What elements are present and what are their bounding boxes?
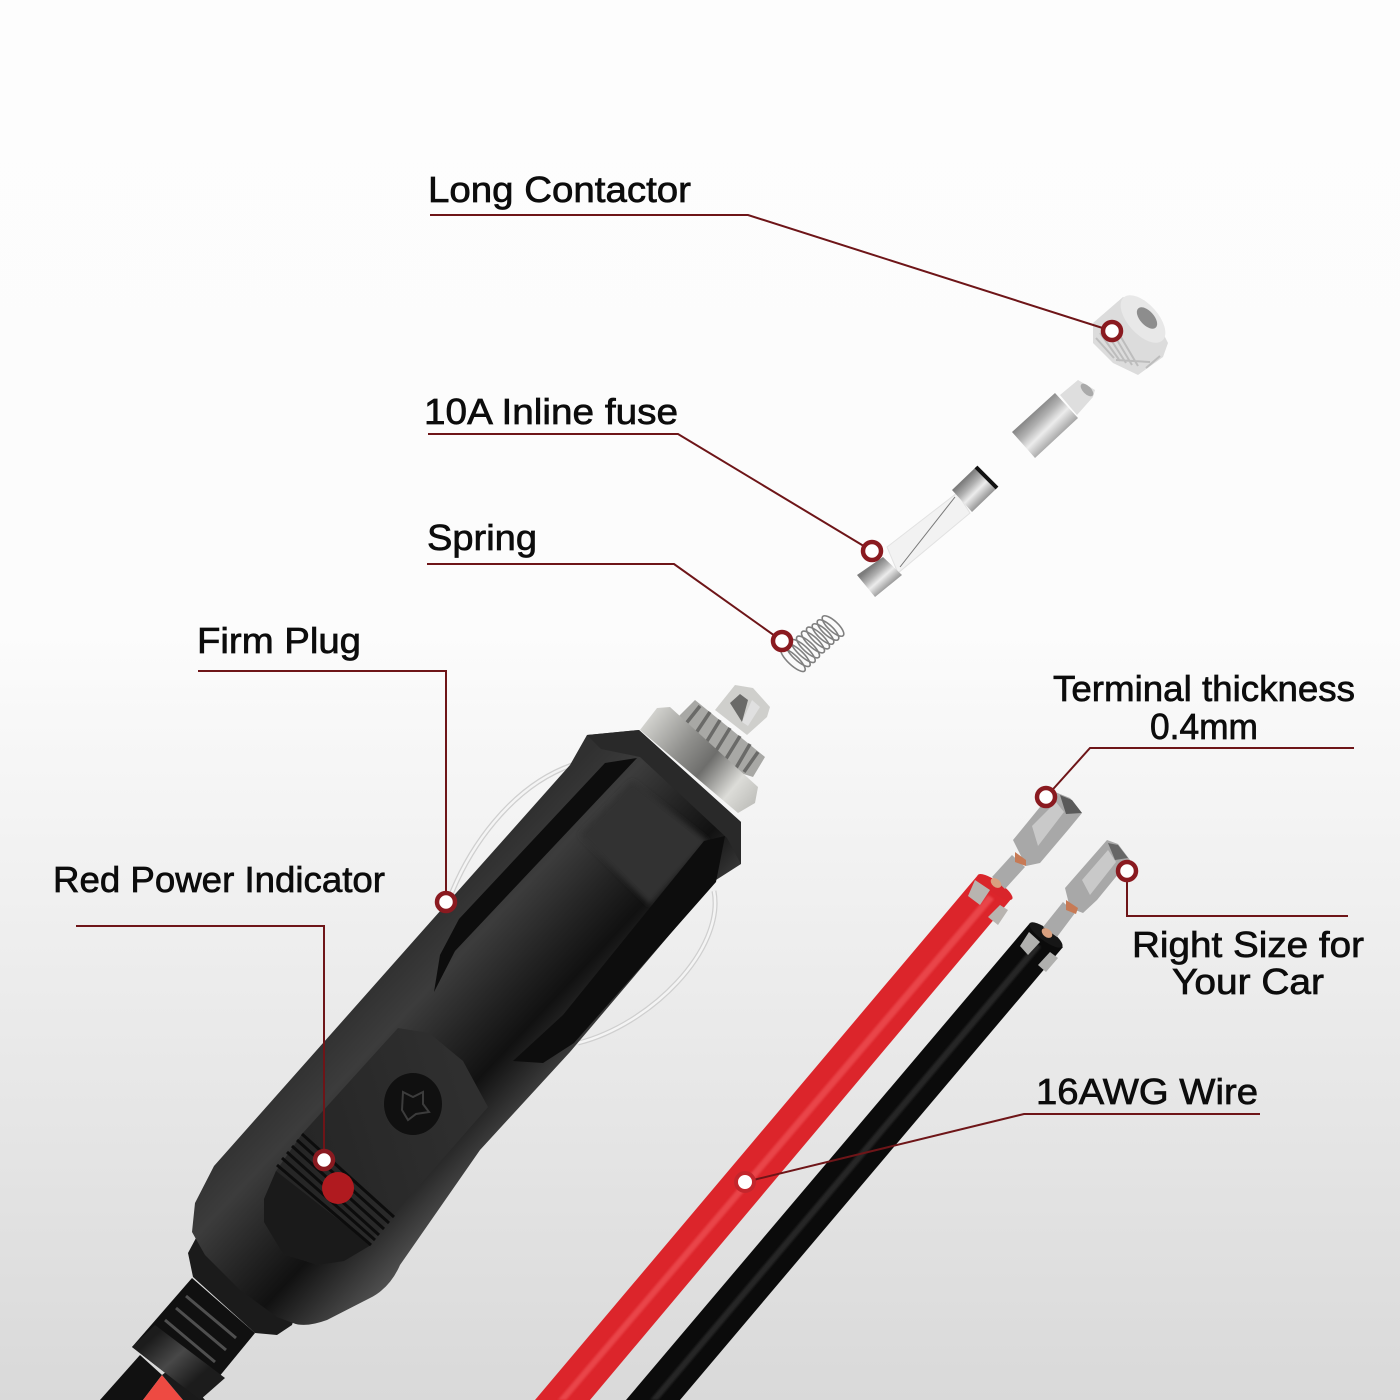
callout: 10A Inline fuse: 10A Inline fuse	[424, 391, 678, 432]
fuse end cap contact	[1012, 380, 1095, 458]
spring	[778, 613, 847, 675]
plug metal tip	[640, 685, 770, 813]
callout: Firm Plug	[197, 620, 455, 911]
plate lower dark area	[264, 1171, 371, 1265]
black wire	[626, 918, 1066, 1400]
ring contact loop top	[442, 765, 572, 920]
callout: Spring	[427, 517, 791, 650]
callout: Terminal thickness 0.4mm	[1037, 668, 1355, 806]
callout: 16AWG Wire: 16AWG Wire	[1036, 1071, 1258, 1112]
callout: Red Power Indicator	[53, 859, 385, 1169]
callout: Terminal thickness 0.4mm: 0.4mm	[1150, 706, 1258, 747]
red indicator LED	[322, 1172, 354, 1204]
callout: Right Size for Your Car: Your Car	[1172, 961, 1324, 1002]
upper groove	[434, 758, 637, 992]
switch plate	[264, 1028, 488, 1265]
front chamfer	[587, 730, 741, 864]
screw	[384, 1073, 442, 1135]
upper terminal	[989, 792, 1082, 890]
callout: Right Size for Your Car: Right Size for	[1132, 924, 1364, 965]
ribs	[277, 1134, 394, 1245]
callout: 10A Inline fuse	[424, 391, 881, 560]
callout: Long Contactor	[428, 169, 1121, 340]
lower groove	[513, 836, 725, 1063]
ring contact loop top highlight	[442, 765, 572, 920]
glass fuse	[857, 467, 997, 597]
callout: Long Contactor: Long Contactor	[428, 169, 691, 210]
callout: 16AWG Wire	[736, 1071, 1260, 1191]
knurled nut	[1093, 287, 1174, 375]
callout: Terminal thickness 0.4mm: Terminal thickness	[1053, 668, 1355, 709]
ring contact loop bottom highlight	[578, 891, 715, 1043]
plug body	[192, 730, 741, 1325]
plug cable	[100, 1278, 255, 1400]
red wire	[535, 870, 1016, 1400]
ring contact loop bottom	[578, 891, 715, 1043]
callout: Right Size for Your Car	[1118, 862, 1364, 1002]
lower terminal	[1040, 840, 1130, 940]
callout: Firm Plug: Firm Plug	[197, 620, 361, 661]
callout: Spring: Spring	[427, 517, 537, 558]
plug collar	[188, 1225, 300, 1335]
callout: Red Power Indicator: Red Power Indicator	[53, 859, 385, 900]
upper face	[580, 781, 708, 905]
